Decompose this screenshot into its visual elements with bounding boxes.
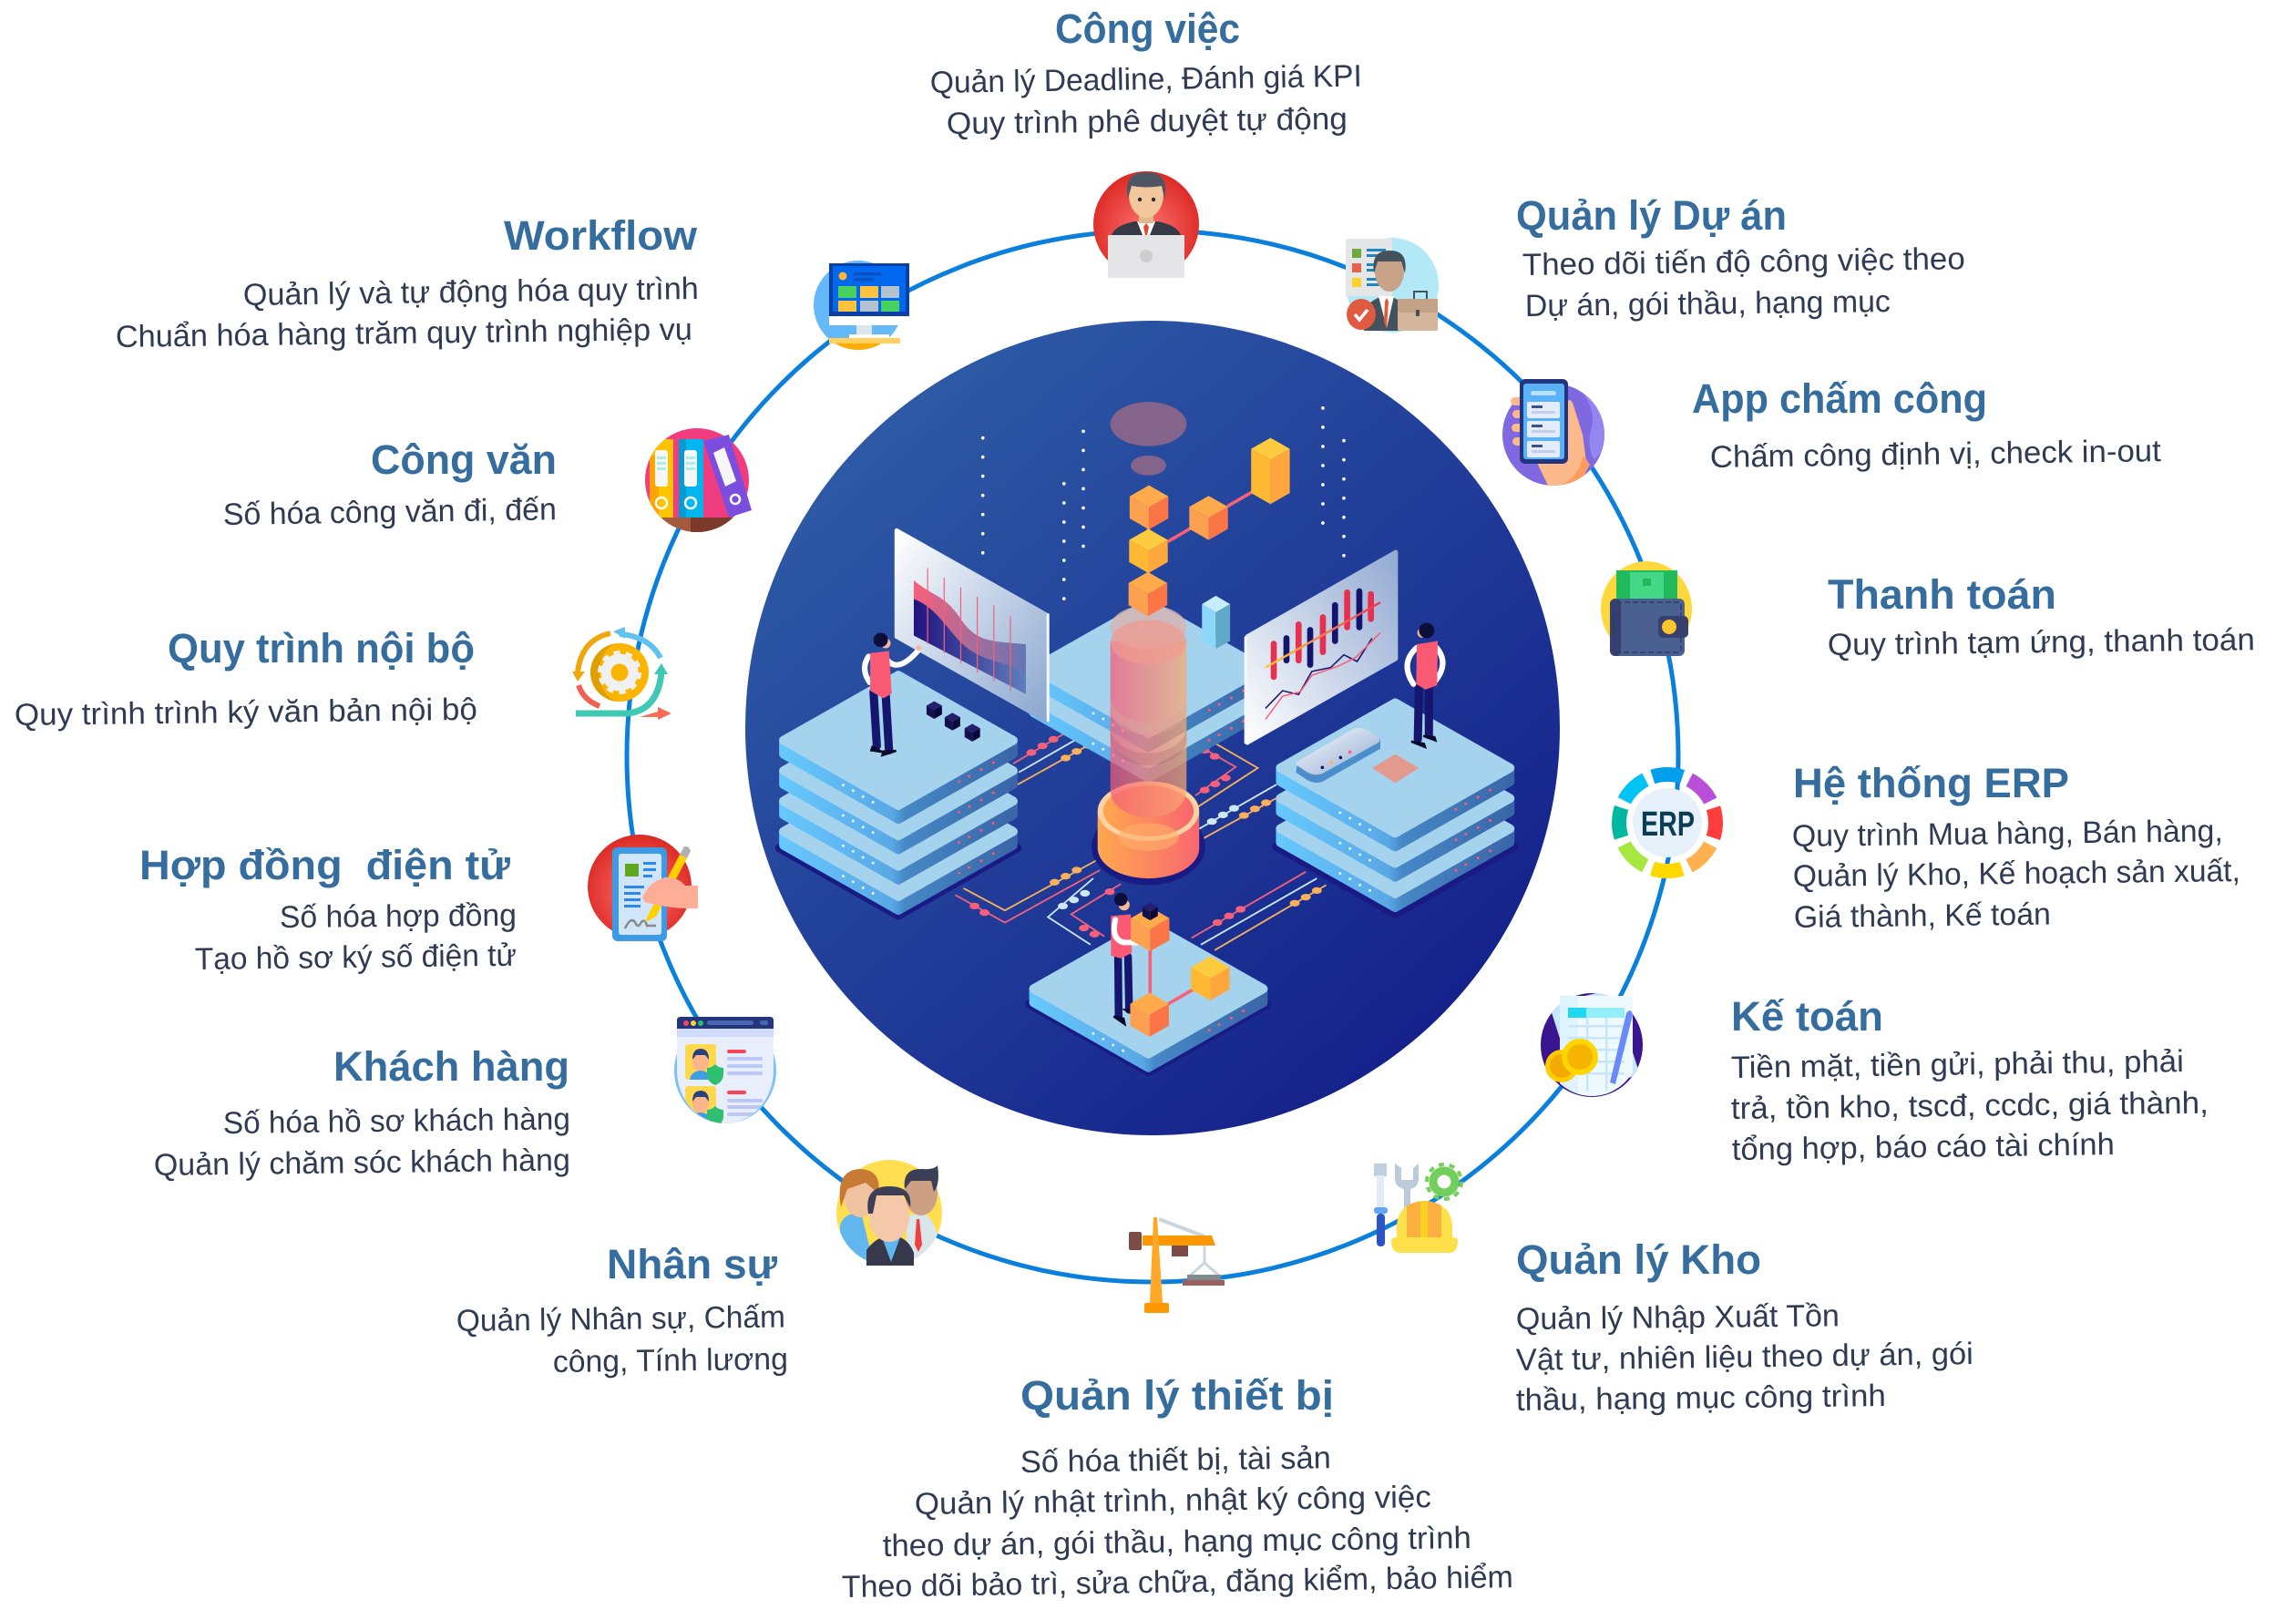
description: Số hóa công văn đi, đến — [223, 492, 557, 532]
heading: Quản lý Kho — [1516, 1236, 1761, 1283]
isometric scene — [780, 402, 1514, 1071]
description — [456, 1300, 788, 1379]
description: Quản lý Kho, Kế hoạch sản xuất, — [1793, 854, 2240, 894]
description: theo dự án, gói thầu, hạng mục công trình — [883, 1521, 1471, 1564]
pink tile — [1372, 754, 1419, 783]
text block: Quy trình nội bộ — [15, 625, 477, 733]
pedestal cylinder — [1092, 781, 1205, 885]
heading: Kế toán — [1731, 993, 1883, 1040]
icon: tools and helmet (Quản lý Kho) — [1374, 1164, 1461, 1253]
floating ellipses — [1111, 402, 1186, 476]
description: Số hóa hợp đồng — [280, 898, 517, 935]
description — [842, 1441, 1513, 1605]
description — [154, 1102, 570, 1183]
text block: Quản lý Kho — [1516, 1236, 1973, 1418]
device on right platform — [1296, 728, 1380, 783]
gear — [1427, 1164, 1461, 1199]
front platform — [1030, 924, 1267, 1071]
person left — [865, 632, 921, 755]
icon: ERP chip ring (Hệ thống ERP) — [1599, 754, 1736, 891]
left chart panel — [897, 530, 1048, 721]
heading: Khách hàng — [333, 1043, 569, 1090]
left platform stack — [780, 675, 1017, 916]
text block: Quản lý thiết bị — [842, 1372, 1513, 1605]
heading: Workflow — [504, 212, 698, 259]
translucent beam — [1111, 605, 1186, 817]
heading: Hợp đồng điện tử — [139, 842, 510, 888]
small dark cubes — [927, 702, 980, 742]
icon: e-contract signing (Hợp đồng điện tử) — [588, 835, 698, 941]
connector lines — [1148, 487, 1262, 541]
icon: cycle with gear (Quy trình nội bộ) — [572, 627, 671, 720]
heading: Quy trình nội bộ — [168, 625, 475, 672]
description: Chấm công định vị, check in-out — [1710, 434, 2162, 475]
icon: customer profile window (Khách hàng) — [674, 1017, 776, 1127]
icon: team of people (Nhân sự) — [836, 1160, 942, 1268]
description: Quản lý nhật trình, nhật ký công việc — [915, 1480, 1431, 1522]
heading: App chấm công — [1692, 375, 1987, 422]
person right — [1408, 623, 1442, 747]
description — [195, 898, 517, 977]
description: Tạo hồ sơ ký số điện tử — [195, 938, 517, 977]
text block: Hệ thống ERP — [1792, 760, 2240, 935]
text block: Công văn — [223, 436, 557, 532]
heading: Quản lý thiết bị — [1020, 1372, 1334, 1419]
description — [1792, 814, 2240, 935]
icon: project manager with checklist (Quản lý Dự án) — [1346, 238, 1439, 333]
connecting ring — [627, 231, 1678, 1282]
circuit beads — [969, 736, 1322, 938]
icon: wallet with cash (Thanh toán) — [1601, 561, 1692, 656]
description: Số hóa hồ sơ khách hàng — [223, 1102, 570, 1141]
icon: accounting sheet with coins (Kế toán) — [1541, 989, 1643, 1098]
description: Dự án, gói thầu, hạng mục — [1525, 284, 1891, 323]
description: Quy trình phê duyệt tự động — [947, 102, 1348, 141]
person front with box — [1111, 893, 1142, 1024]
description: Vật tư, nhiên liệu theo dự án, gói — [1516, 1337, 1973, 1378]
heading: Công việc — [1055, 5, 1240, 52]
icon: monitor dashboard (Workflow) — [814, 261, 909, 353]
heading: Quản lý Dự án — [1516, 192, 1787, 239]
right platform stack — [1276, 702, 1514, 914]
description: Tiền mặt, tiền gửi, phải thu, phải — [1731, 1044, 2184, 1085]
data dots — [983, 408, 1344, 599]
description: Theo dõi bảo trì, sửa chữa, đăng kiểm, bảo hiểm — [842, 1560, 1513, 1605]
text block: Hợp đồng điện tử — [139, 842, 517, 977]
heading: Nhân sự — [607, 1241, 777, 1287]
description: trả, tồn kho, tscđ, ccdc, giá thành, — [1731, 1086, 2209, 1126]
description: Quy trình Mua hàng, Bán hàng, — [1792, 814, 2223, 854]
text block: Workflow — [116, 212, 699, 354]
description: Quy trình trình ký văn bản nội bộ — [15, 692, 477, 733]
heading: Thanh toán — [1828, 571, 2056, 618]
right chart panel — [1245, 552, 1396, 743]
light blue box — [1202, 596, 1230, 649]
text block: Thanh toán — [1828, 571, 2255, 662]
description — [1516, 1298, 1973, 1418]
description: Theo dõi tiến độ công việc theo — [1522, 241, 1965, 282]
circuit lines — [955, 733, 1327, 950]
icon: construction crane (Quản lý thiết bị) — [1129, 1217, 1225, 1313]
text block: Khách hàng — [154, 1043, 570, 1183]
icon: smartphone in hand (App chấm công) — [1502, 379, 1607, 492]
description: Quản lý chăm sóc khách hàng — [154, 1143, 570, 1183]
front platform cubes — [1130, 903, 1230, 1037]
text block: Kế toán — [1731, 993, 2209, 1167]
description: Quản lý và tự động hóa quy trình — [243, 272, 699, 313]
description: Quản lý Nhập Xuất Tồn — [1516, 1298, 1840, 1337]
description: Giá thành, Kế toán — [1794, 897, 2051, 935]
back platform — [1030, 603, 1267, 778]
ERP label: ERP — [1641, 805, 1695, 844]
description: Quy trình tạm ứng, thanh toán — [1828, 622, 2255, 662]
description: Quản lý Nhân sự, Chấm — [456, 1300, 785, 1338]
text block: Nhân sự — [456, 1241, 788, 1379]
icon: person with laptop (Công việc) — [1093, 171, 1199, 278]
description: Quản lý Deadline, Đánh giá KPI — [930, 59, 1362, 100]
description: thầu, hạng mục công trình — [1516, 1379, 1886, 1418]
text block: Công việc — [930, 5, 1362, 141]
description — [1522, 241, 1965, 323]
heading: Hệ thống ERP — [1793, 760, 2069, 806]
description — [1731, 1044, 2209, 1167]
icon: document binders (Công văn) — [644, 428, 752, 534]
blue circle background — [745, 321, 1560, 1135]
description: Số hóa thiết bị, tài sản — [1020, 1441, 1331, 1480]
text block: Quản lý Dự án — [1516, 192, 1965, 323]
heading: Công văn — [371, 436, 557, 483]
description: công, Tính lương — [553, 1342, 788, 1379]
description: Chuẩn hóa hàng trăm quy trình nghiệp vụ — [116, 313, 692, 354]
ERP coloured segments — [1599, 754, 1736, 891]
description: tổng hợp, báo cáo tài chính — [1732, 1127, 2115, 1167]
central illustration: blue circle with isometric data platforms — [745, 321, 1560, 1135]
text block: App chấm công — [1692, 375, 2162, 475]
description — [116, 272, 699, 354]
description — [930, 59, 1362, 141]
floating cubes — [1129, 438, 1290, 616]
